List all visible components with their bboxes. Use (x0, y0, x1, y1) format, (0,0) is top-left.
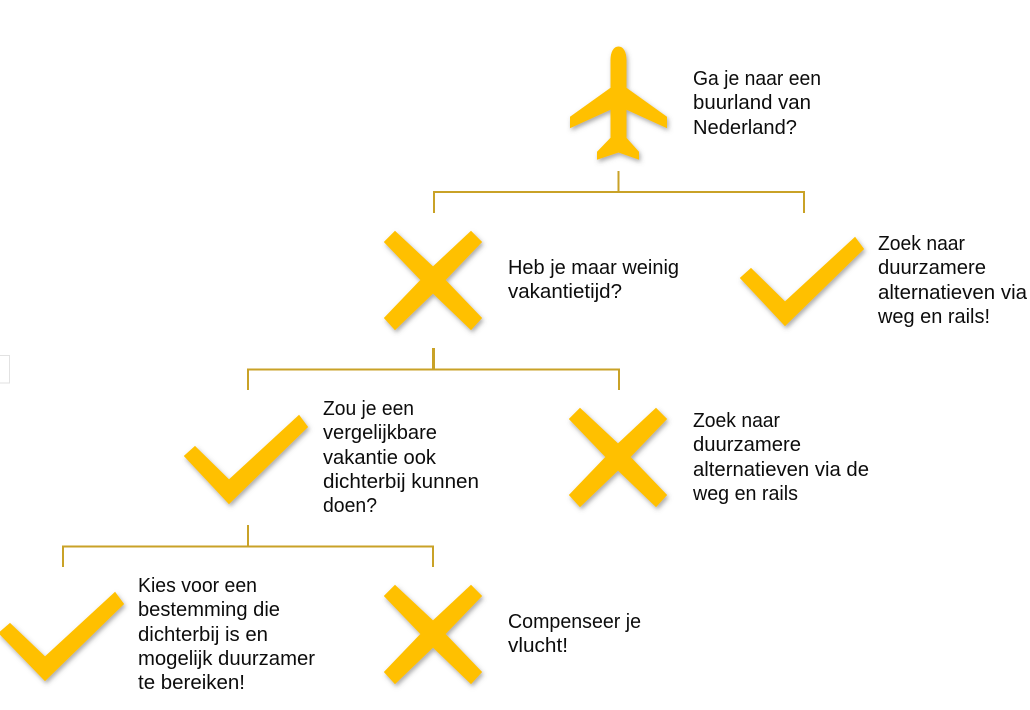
question: similar holiday closer by: vakantie ook (323, 446, 437, 469)
advice: compensate your flight: Compenseer je (508, 610, 641, 633)
advice: sustainable alternatives: weg en rails! (877, 305, 990, 328)
connector: level 2 (432, 348, 435, 369)
advice: sustainable alternatives: duurzamere (878, 256, 986, 279)
connector: level 2 branches (248, 370, 619, 390)
advice: sustainable alternatives: Zoek naar (878, 232, 965, 255)
advice: compensate your flight: vlucht! (508, 634, 568, 657)
icon: check, little holiday time (184, 416, 308, 504)
question: similar holiday closer by: dichterbij kunnen (323, 470, 479, 493)
advice: alternatives by road and rail: weg en rails (692, 482, 798, 505)
question: similar holiday closer by: vergelijkbare (323, 421, 437, 444)
advice: sustainable alternatives (877, 232, 1028, 328)
advice: choose a closer destination: bestemming die (138, 598, 280, 621)
advice: alternatives by road and rail: Zoek naar (693, 409, 780, 432)
advice: compensate your flight (508, 610, 641, 657)
icon: cross, plenty of holiday time (570, 408, 666, 506)
question: neighbouring country: buurland van (693, 91, 811, 114)
advice: choose a closer destination (138, 574, 315, 694)
advice: choose a closer destination: Kies voor een (138, 574, 257, 597)
advice: sustainable alternatives: alternatieven via (878, 281, 1028, 304)
connector: level 3 (63, 525, 433, 567)
question: little holiday time (508, 256, 679, 303)
question: neighbouring country: Ga je naar een (693, 67, 821, 90)
icon: cross, no neighbouring country (384, 232, 482, 330)
advice: choose a closer destination: mogelijk duurzamer (138, 647, 315, 670)
advice: alternatives by road and rail: alternatieven via de (693, 458, 869, 481)
question: little holiday time: Heb je maar weinig (508, 256, 679, 279)
connector: level 1 (434, 171, 804, 213)
icon: cross, no similar holiday (384, 586, 482, 684)
stray box at left edge (0, 356, 10, 383)
icon: check, neighbouring country (740, 238, 864, 326)
advice: choose a closer destination: te bereiken! (138, 671, 245, 694)
question: neighbouring country: Nederland? (693, 116, 797, 139)
question: neighbouring country (693, 67, 821, 139)
icon: check, similar holiday possible (0, 592, 124, 680)
advice: alternatives by road and rail: duurzamere (693, 433, 801, 456)
question: little holiday time: vakantietijd? (508, 280, 622, 303)
advice: choose a closer destination: dichterbij is en (138, 623, 268, 646)
icon: airplane (570, 47, 666, 159)
advice: alternatives by road and rail (692, 409, 869, 505)
question: similar holiday closer by (323, 397, 479, 517)
question: similar holiday closer by: Zou je een (323, 397, 414, 420)
question: similar holiday closer by: doen? (323, 494, 377, 517)
